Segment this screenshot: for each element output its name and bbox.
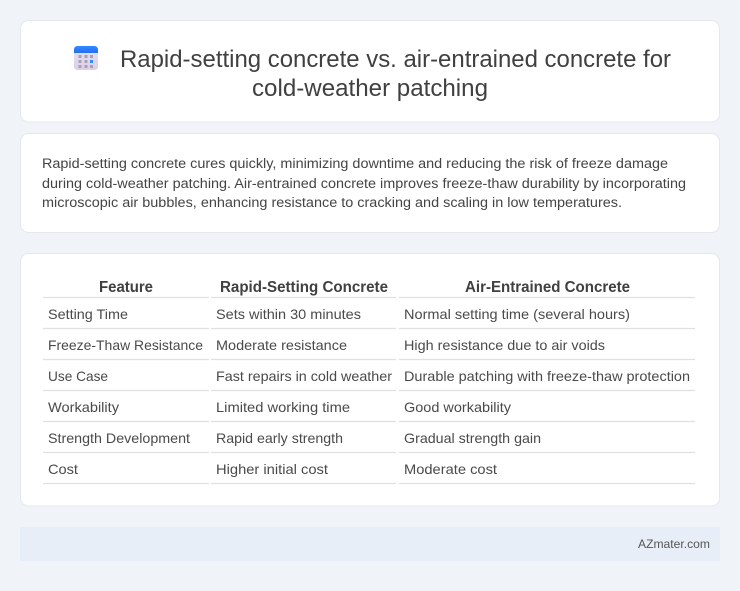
row: strength development: Gradual strength gain [404, 430, 541, 446]
text block: summary: Rapid-setting concrete cures quickly, minimizing downtime and reducing the risk of freeze damage [42, 156, 668, 172]
row: freeze-thaw resistance: Moderate resistance [216, 337, 347, 353]
panel: comparison table [20, 254, 720, 506]
row: use case [48, 368, 690, 384]
table header: Rapid-Setting Concrete [220, 279, 388, 296]
title [120, 46, 671, 102]
row: strength development [48, 430, 541, 446]
text block: summary: during cold-weather patching. Air-entrained concrete improves freeze-thaw durability by incorporating [42, 176, 686, 192]
row: use case: Fast repairs in cold weather [216, 368, 392, 384]
table header: Feature [99, 279, 153, 296]
panel: introduction [20, 134, 720, 232]
row: cost: Higher initial cost [216, 461, 328, 477]
text block: summary [42, 156, 686, 211]
row: cost: Moderate cost [404, 461, 497, 477]
row: freeze-thaw resistance [48, 337, 605, 353]
row: cost [48, 461, 497, 477]
row: use case: Durable patching with freeze-thaw protection [404, 368, 690, 384]
row: setting time: Sets within 30 minutes [216, 306, 361, 322]
row: workability [48, 399, 511, 415]
row: setting time [48, 306, 630, 322]
row: setting time: Setting Time [48, 306, 128, 322]
row: workability: Good workability [404, 399, 511, 415]
row: cost: Cost [48, 461, 78, 477]
table header: Air-Entrained Concrete [465, 279, 630, 296]
row: strength development: Rapid early strength [216, 430, 343, 446]
row: use case: Use Case [48, 368, 108, 384]
text block: summary: microscopic air bubbles, enhancing resistance to cracking and scaling in low temperatures. [42, 195, 622, 211]
title: Rapid-setting concrete vs. air-entrained concrete for [120, 46, 671, 73]
row: workability: Limited working time [216, 399, 350, 415]
row: freeze-thaw resistance: Freeze-Thaw Resistance [48, 337, 203, 353]
icon: calendar [74, 46, 98, 70]
row: strength development: Strength Development [48, 430, 190, 446]
table header [99, 279, 630, 296]
title: cold-weather patching [252, 75, 488, 102]
row: workability: Workability [48, 399, 119, 415]
footer credit: AZmater.com [638, 537, 710, 551]
panel: title card [20, 20, 720, 122]
row: freeze-thaw resistance: High resistance due to air voids [404, 337, 605, 353]
footer bar [20, 527, 720, 561]
row: setting time: Normal setting time (several hours) [404, 306, 630, 322]
